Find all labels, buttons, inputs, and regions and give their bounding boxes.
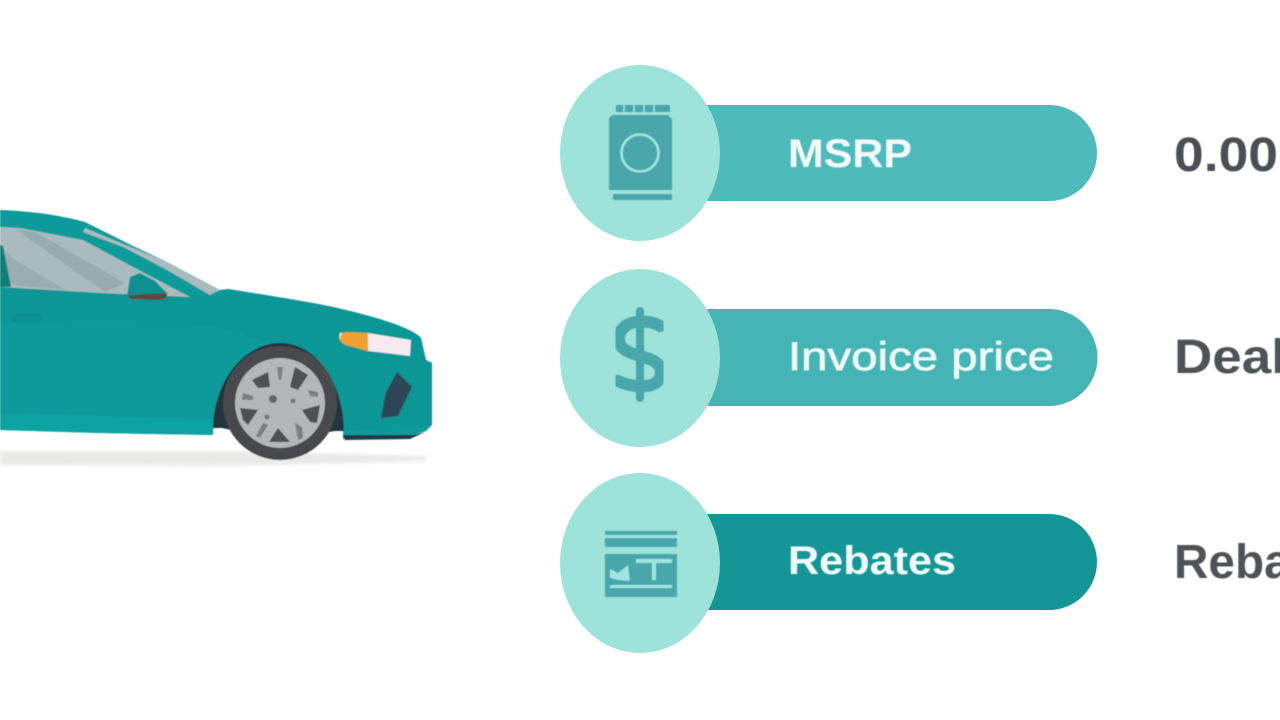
car body xyxy=(0,210,432,439)
icon: document with circle xyxy=(609,105,672,200)
label: Rebates xyxy=(788,539,956,583)
value: 0.00 xyxy=(1174,129,1278,182)
circle xyxy=(560,473,720,653)
ground shadow xyxy=(0,451,427,466)
door handle xyxy=(12,313,42,322)
icon: rebate card xyxy=(605,531,677,597)
row 1: MSRP xyxy=(560,65,1278,241)
label: MSRP xyxy=(788,132,912,176)
side mirror xyxy=(127,273,167,298)
tire xyxy=(223,346,337,460)
wheel arch xyxy=(213,343,344,440)
illustration: teal car, front half xyxy=(0,210,432,466)
hub xyxy=(269,395,277,403)
side window xyxy=(0,227,190,297)
row 2: Invoice price xyxy=(560,269,1280,447)
front wheel xyxy=(223,346,337,460)
hood shade xyxy=(0,288,432,431)
lower sill highlight xyxy=(0,413,213,435)
bumper lip xyxy=(343,432,425,440)
headlight xyxy=(339,333,411,356)
pill xyxy=(700,309,1098,406)
rim openings xyxy=(240,367,320,442)
pill xyxy=(700,514,1097,610)
window reflections xyxy=(15,229,125,292)
front air vent xyxy=(381,372,412,418)
icon: dollar sign xyxy=(618,311,661,398)
rim xyxy=(235,358,325,448)
door pillar xyxy=(0,245,11,287)
windshield strip xyxy=(83,228,220,295)
label: Invoice price xyxy=(788,335,1054,379)
circle xyxy=(560,65,720,241)
row 3: Rebates xyxy=(560,473,1280,653)
pill xyxy=(700,105,1097,201)
circle xyxy=(560,269,720,447)
value: Deal xyxy=(1174,331,1280,384)
